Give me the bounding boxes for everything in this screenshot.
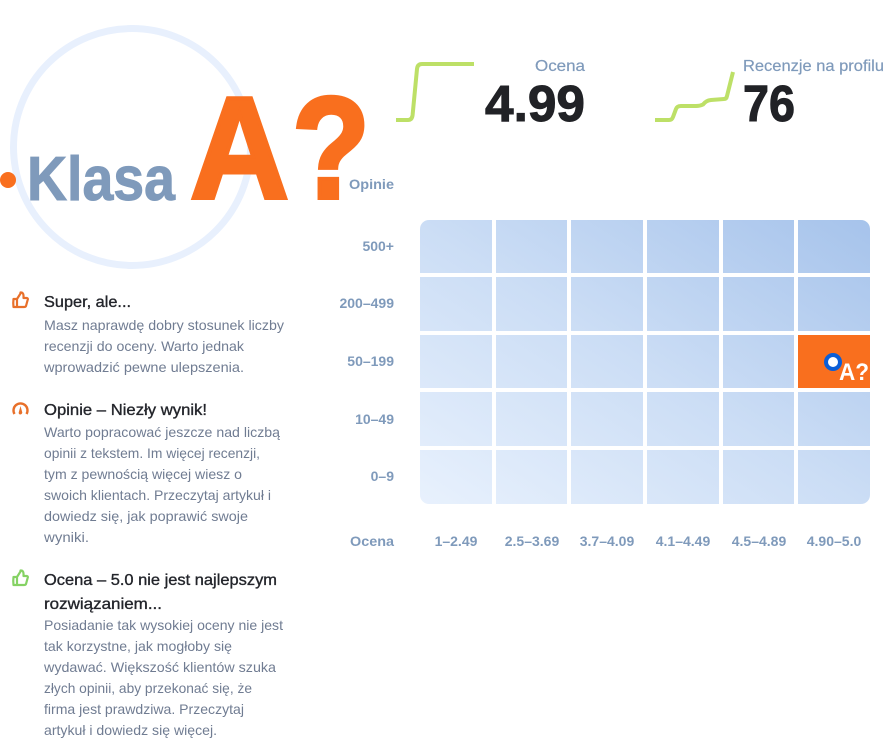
orange dot (0, 172, 16, 188)
text block: Super, ale: Masz naprawdę dobry stosunek liczby (44, 317, 284, 333)
heatmap grid (420, 220, 870, 504)
text block: Ocena: artykuł i dowiedz się więcej. (44, 722, 217, 738)
heading: Klasa A?: Klasa (27, 145, 175, 214)
text block: Ocena: Posiadanie tak wysokiej oceny nie jest (44, 617, 283, 633)
column labels (435, 533, 861, 549)
icon: gauge orange (13, 403, 28, 414)
column labels: 3.7–4.09 (580, 533, 634, 549)
text block: Opinie: dowiedz się, jak poprawić swoje (44, 508, 248, 524)
text block: Super, ale (43, 294, 284, 375)
text block: Opinie: opinii z tekstem. Im więcej recenzji, (44, 445, 260, 461)
column labels: 4.1–4.49 (656, 533, 710, 549)
axis label: Ocena: Ocena (350, 533, 394, 549)
row labels: 500+ (362, 238, 394, 254)
stat: rating: Ocena (535, 58, 585, 75)
row labels: 10–49 (355, 411, 394, 427)
text block: Ocena (43, 572, 283, 738)
text block: Opinie: wyniki. (43, 529, 89, 545)
column labels: 4.5–4.89 (732, 533, 786, 549)
row labels: 0–9 (371, 468, 394, 484)
stat: rating: 4.99 (485, 75, 585, 132)
text block: Ocena: tak korzystne, jak mogłoby się (44, 638, 232, 654)
icon: thumbs up orange (13, 292, 28, 307)
text block: Ocena: wydawać. Większość klientów szuka (43, 659, 276, 675)
axis label: Opinie: Opinie (349, 176, 394, 192)
sparkline: reviews (655, 72, 733, 120)
text block: Super, ale: wprowadzić pewne ulepszenia. (43, 359, 244, 375)
stat: reviews on profile: Recenzje na profilu (743, 58, 884, 75)
row labels: 50–199 (347, 353, 394, 369)
text block: Ocena: rozwiązaniem... (44, 596, 162, 613)
stat: reviews on profile: 76 (743, 75, 795, 132)
row labels: 200–499 (339, 295, 394, 311)
sparkline: rating (396, 64, 474, 120)
column labels: 2.5–3.69 (505, 533, 559, 549)
text block: Opinie: Opinie – Niezły wynik! (44, 402, 207, 419)
text block: Opinie: swoich klientach. Przeczytaj artykuł i (44, 487, 271, 503)
heading: Klasa A?: A (190, 67, 289, 229)
text block: Opinie (43, 402, 280, 545)
text block: Ocena: Ocena – 5.0 nie jest najlepszym (44, 572, 277, 589)
highlighted cell with marker (798, 335, 870, 388)
stat: reviews on profile (743, 58, 884, 132)
highlighted cell with marker: A? (839, 359, 869, 386)
decorative ring (14, 28, 250, 266)
text block: Opinie: tym z pewnością więcej wiesz o (44, 466, 242, 482)
text block: Super, ale: Super, ale... (44, 294, 131, 311)
row labels (339, 238, 394, 484)
text block: Ocena: firma jest prawdziwa. Przeczytaj (44, 701, 244, 717)
text block: Ocena: złych opinii, aby przekonać się, że (44, 680, 252, 696)
column labels: 1–2.49 (435, 533, 478, 549)
heading: Klasa A? (27, 67, 370, 229)
text block: Opinie: Warto popracować jeszcze nad liczbą (44, 424, 280, 440)
heading: Klasa A?: ? (292, 67, 370, 229)
column labels: 4.90–5.0 (807, 533, 861, 549)
text block: Super, ale: recenzji do oceny. Warto jednak (44, 338, 245, 354)
icon: thumbs up green (13, 570, 28, 585)
